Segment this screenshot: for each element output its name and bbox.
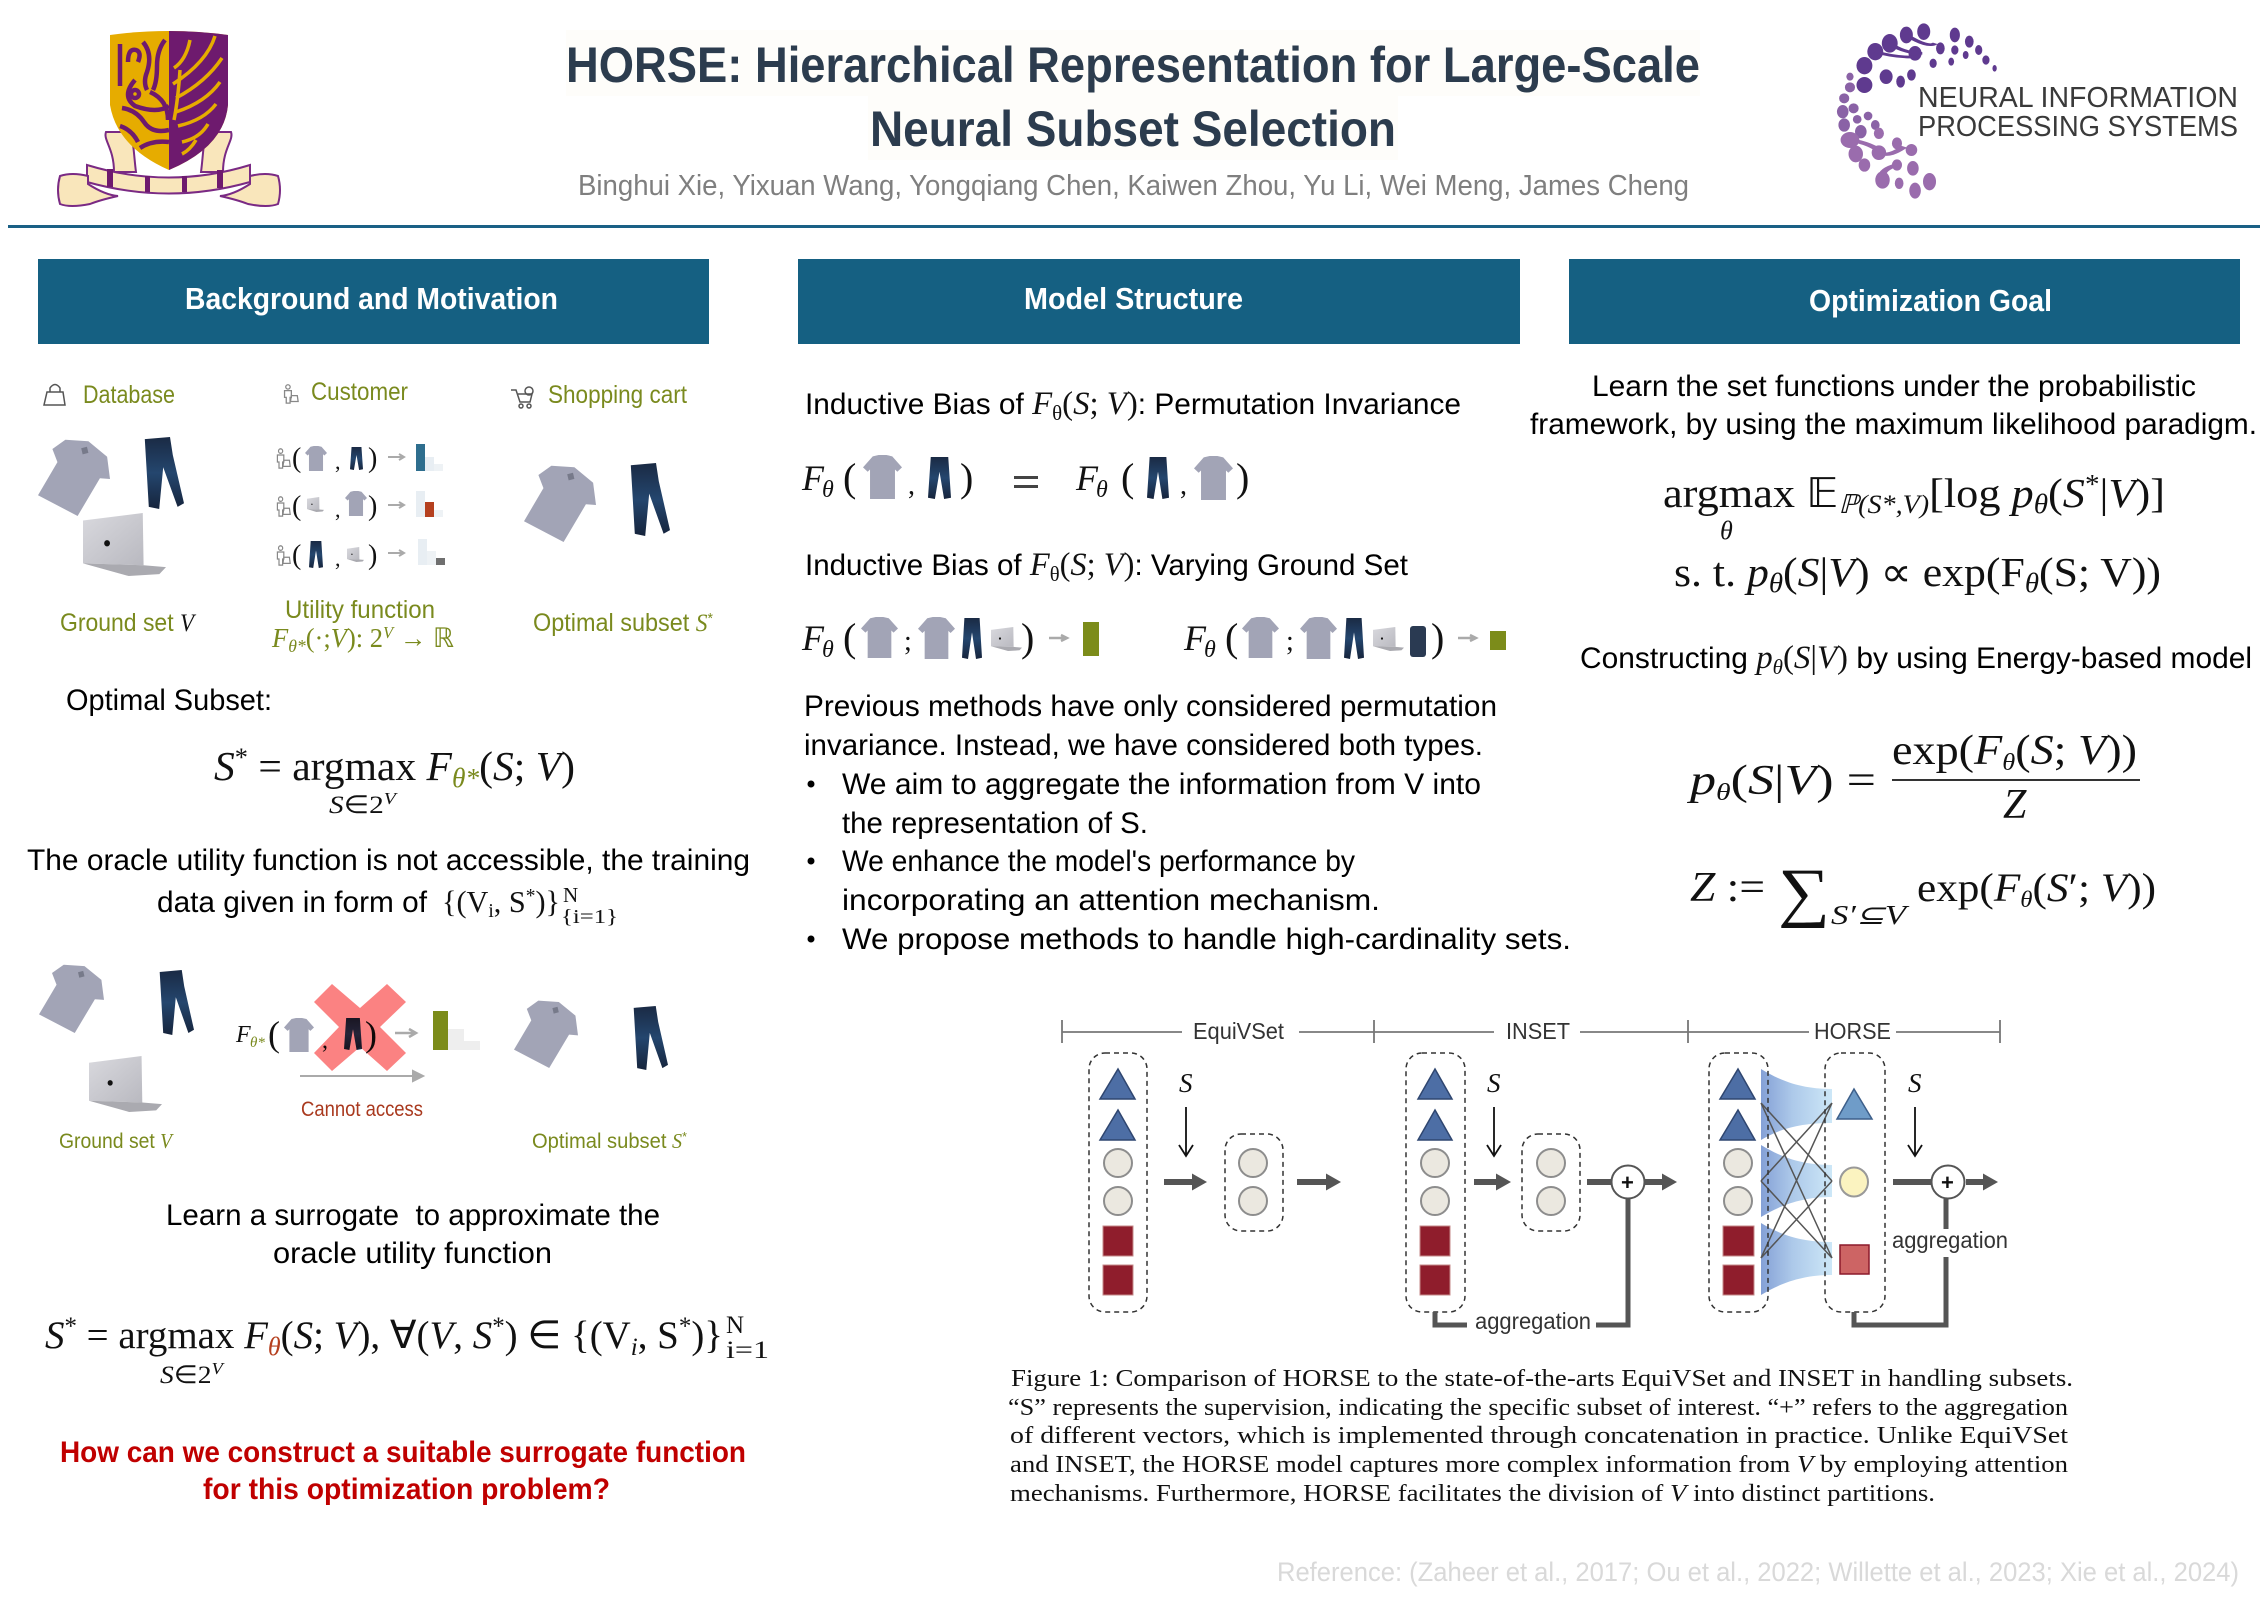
utility rows: ( <box>292 540 301 571</box>
utility rows: , <box>335 497 340 522</box>
equation: varying ground set: ) <box>1431 615 1444 660</box>
formula: optimal subset: S <box>214 743 235 789</box>
label: Utility function: Utility function <box>285 596 435 624</box>
heading: Background and Motivation <box>38 259 709 344</box>
model: INSET <box>1406 1053 1677 1334</box>
callout: question <box>60 1436 746 1506</box>
text: varying ground set: Inductive Bias of F <box>805 547 1050 583</box>
formula: surrogate: * <box>679 1313 691 1340</box>
utility rows: ( <box>292 443 301 474</box>
label: INSET: INSET <box>1506 1018 1570 1044</box>
formula: energy based model: S; V)) <box>2031 728 2134 774</box>
formula: surrogate: ( <box>281 1314 294 1357</box>
text: learn a surrogate <box>166 1199 660 1270</box>
icon: database bag <box>44 384 65 405</box>
label: Utility function: V <box>383 623 396 642</box>
diagram: cannot access: F <box>235 1022 251 1048</box>
model: HORSE: S <box>1908 1068 1922 1098</box>
formula: energy based model: exp(F <box>1892 728 2000 774</box>
formula: optimal subset: * <box>235 743 248 772</box>
formula: surrogate: ) ∈ {(V <box>505 1314 631 1357</box>
equation: permutation invariance: θ <box>1096 477 1108 503</box>
text: previous methods and bullets: We propose methods to handle high-cardinality sets. <box>842 923 1571 956</box>
text: constructing: θ <box>1773 655 1783 679</box>
formula: energy based model: S′; V)) <box>2047 865 2154 910</box>
equation: permutation invariance: , <box>1180 470 1187 501</box>
label: EquiVSet: EquiVSet <box>1193 1018 1285 1044</box>
equation: varying ground set: ( <box>1225 615 1238 660</box>
label: Utility function: → ℝ <box>393 623 454 653</box>
formula: surrogate: * <box>492 1313 505 1340</box>
utility rows: ) <box>368 491 377 522</box>
title block <box>566 30 1700 160</box>
figure caption: and INSET, the HORSE model captures more complex information from V by employing attention <box>1010 1452 2068 1478</box>
model: INSET: S <box>1487 1068 1501 1098</box>
heading: Optimization Goal: Optimization Goal <box>1809 283 2052 318</box>
text: oracle utility <box>27 844 750 928</box>
callout: question: for this optimization problem? <box>203 1473 610 1506</box>
utility rows: , <box>335 449 340 474</box>
diagram: cannot access: ( <box>268 1014 280 1054</box>
formula: surrogate: * <box>64 1313 77 1340</box>
label: Utility function: V): 2 <box>331 623 384 653</box>
utility rows: , <box>335 546 340 571</box>
equation: permutation invariance: F <box>801 458 825 498</box>
equation: varying ground set: ; <box>1286 626 1294 657</box>
formula: surrogate: N <box>726 1312 744 1339</box>
heading: Model Structure: Model Structure <box>1024 281 1243 316</box>
text: oracle utility: The oracle utility function is not accessible, the training <box>27 844 750 877</box>
formula: surrogate: F <box>243 1314 269 1357</box>
text: previous methods and bullets <box>804 690 1571 956</box>
formula: argmax likelihood: ℙ(S*,V) <box>1838 490 1929 519</box>
utility rows: ) <box>368 443 377 474</box>
logo: NeurIPS: PROCESSING SYSTEMS <box>1918 111 2238 143</box>
figure caption: mechanisms. Furthermore, HORSE facilitates the division of V into distinct partitions. <box>1010 1481 1935 1507</box>
formula: energy based model: ( <box>1731 758 1748 804</box>
text: oracle utility: , S <box>494 884 526 919</box>
equation: varying ground set: ; <box>904 626 912 657</box>
formula: energy based model: ( <box>2032 865 2047 910</box>
text: permutation invariance: θ <box>1052 401 1062 425</box>
chart: architecture comparison <box>1062 1018 2008 1334</box>
text: permutation invariance: Inductive Bias of F <box>805 386 1052 422</box>
equation: permutation invariance: θ <box>822 477 834 503</box>
formula: energy based model: p <box>1686 758 1716 804</box>
text: oracle utility: )} <box>535 884 560 919</box>
text: constructing: Constructing p <box>1580 640 1773 676</box>
formula: energy based model: θ <box>2002 750 2015 776</box>
equation: permutation invariance <box>801 455 1249 503</box>
label: Utility function <box>271 596 454 656</box>
text: varying ground set: ( <box>1060 547 1070 583</box>
diagram: cannot access: θ* <box>250 1035 265 1051</box>
formula: surrogate: = argmax <box>77 1314 244 1357</box>
equation: permutation invariance: ( <box>1121 455 1134 500</box>
formula: optimal subset: θ* <box>452 763 480 793</box>
equation: varying ground set: F <box>801 618 825 658</box>
text: learn set functions: Learn the set functions under the probabilistic <box>1592 370 2196 403</box>
figure caption: of different vectors, which is implemented through concatenation in practice. Unlike EquiVSet <box>1010 1423 2068 1449</box>
icon: cart <box>511 387 533 408</box>
formula: argmax likelihood: V)] <box>2108 470 2163 516</box>
model: EquiVSet: S <box>1179 1068 1193 1098</box>
formula: argmax likelihood: θ <box>1769 568 1783 598</box>
diagram: cannot access <box>39 965 668 1112</box>
title block: Neural Subset Selection <box>870 101 1396 157</box>
formula: energy based model <box>1686 728 2156 930</box>
label: Ground set V: Ground set V <box>60 609 196 637</box>
diagram: cannot access: , <box>322 1028 328 1054</box>
figure caption <box>1008 1366 2073 1507</box>
equation: permutation invariance: ) <box>1236 455 1249 500</box>
formula: optimal subset: S∈2 <box>329 792 378 819</box>
formula: surrogate: i <box>631 1334 638 1361</box>
equation: varying ground set: θ <box>1204 637 1216 663</box>
formula: surrogate: S∈2 <box>160 1362 208 1389</box>
text: learn a surrogate: oracle utility function <box>273 1237 552 1270</box>
formula: energy based model: S′⊆V <box>1831 900 1910 930</box>
text: learn set functions <box>1530 370 2257 441</box>
formula: argmax likelihood: θ <box>2034 489 2048 519</box>
panel: Background and Motivation <box>27 259 769 1506</box>
heading: Optimization Goal <box>1569 259 2240 344</box>
label: Utility function: F <box>271 623 289 653</box>
formula: argmax likelihood: s. t. p <box>1674 549 1767 595</box>
formula: argmax likelihood: ( <box>2048 470 2063 516</box>
label: Database: Database <box>83 381 175 409</box>
equation: varying ground set: F <box>1183 618 1207 658</box>
model: EquiVSet <box>1089 1053 1341 1312</box>
label: Ground set V: Ground set V <box>59 1129 174 1153</box>
panel: Model Structure <box>798 259 1571 956</box>
label: Optimal subset S*: Optimal subset S <box>533 609 708 637</box>
label: Customer: Customer <box>311 378 408 406</box>
text: constructing: ( <box>1783 640 1794 676</box>
text: previous methods and bullets: invariance. Instead, we have considered both types. <box>804 729 1483 762</box>
equation: permutation invariance: ( <box>843 455 856 500</box>
label: Optimal subset S*: * <box>708 610 713 627</box>
formula: argmax likelihood: argmax 𝔼 <box>1663 470 1825 516</box>
logo: NeurIPS: NEURAL INFORMATION <box>1918 82 2238 114</box>
reference note: Reference: (Zaheer et al., 2017; Ou et al., 2022; Willette et al., 2023; Xie et al., 2024) <box>1277 1557 2239 1587</box>
formula: argmax likelihood <box>1663 469 2165 598</box>
text: oracle utility: * <box>526 885 535 907</box>
icon: customer <box>285 385 298 403</box>
label: Cannot access: Cannot access <box>301 1098 423 1121</box>
formula: optimal subset: ( <box>479 743 493 789</box>
text: constructing: S|V) by using Energy-based model <box>1794 640 2253 676</box>
heading: Model Structure <box>798 259 1520 344</box>
formula: optimal subset <box>214 743 575 819</box>
text: previous methods and bullets: Previous methods have only considered permutation <box>804 690 1497 723</box>
formula: energy based model: Z := <box>1690 865 1765 911</box>
formula: optimal subset: = argmax <box>248 743 427 789</box>
model: INSET: aggregation <box>1475 1308 1591 1334</box>
utility rows <box>277 443 445 571</box>
formula: surrogate: )} <box>691 1314 723 1357</box>
label: HORSE: HORSE <box>1814 1018 1891 1044</box>
formula: surrogate <box>45 1312 769 1389</box>
formula: argmax likelihood: (S; V)) <box>2039 549 2161 595</box>
utility rows: ( <box>292 491 301 522</box>
heading: Background and Motivation: Background and Motivation <box>185 281 558 316</box>
text: oracle utility: data given in form of <box>157 886 428 919</box>
equation: permutation invariance: F <box>1075 458 1099 498</box>
text: oracle utility: N <box>563 883 578 907</box>
section ruler <box>1062 1020 2000 1043</box>
formula: surrogate: θ <box>268 1332 281 1361</box>
callout: question: How can we construct a suitable surrogate function <box>60 1436 746 1469</box>
label: Utility function: θ* <box>288 636 306 656</box>
text: oracle utility: {(V <box>442 884 490 919</box>
formula: energy based model: ∑ <box>1778 856 1830 929</box>
label: Optimal subset S*: * <box>682 1129 687 1144</box>
model: HORSE: + <box>1941 1170 1954 1195</box>
formula: surrogate: S; V), ∀(V, S <box>294 1314 492 1357</box>
formula: optimal subset: S; V) <box>493 743 575 789</box>
formula: argmax likelihood: ( <box>1783 549 1798 595</box>
formula: optimal subset: V <box>384 789 399 808</box>
formula: argmax likelihood: p <box>2008 470 2034 516</box>
formula: surrogate: i=1 <box>726 1337 769 1364</box>
formula: argmax likelihood: [log <box>1929 470 2012 516</box>
text: oracle utility: {i=1} <box>561 906 618 928</box>
text: previous methods and bullets: We aim to aggregate the information from V into <box>842 768 1481 801</box>
model: HORSE <box>1709 1053 2008 1325</box>
formula: argmax likelihood: θ <box>1720 516 1733 545</box>
formula: surrogate: V <box>212 1359 226 1378</box>
text: learn a surrogate: Learn a surrogate to approximate the <box>166 1199 660 1232</box>
text: previous methods and bullets: incorporating an attention mechanism. <box>842 884 1380 917</box>
text: permutation invariance: ( <box>1062 386 1073 422</box>
equation: varying ground set: ) <box>1021 615 1034 660</box>
label: Shopping cart: Shopping cart <box>548 381 687 409</box>
model: HORSE: aggregation <box>1892 1227 2008 1253</box>
formula: surrogate: S <box>45 1314 64 1357</box>
title block: HORSE: Hierarchical Representation for Large-Scale <box>566 37 1700 93</box>
formula: energy based model: ( <box>2015 728 2031 774</box>
text: varying ground set: S; V): Varying Ground Set <box>1070 547 1412 583</box>
figure caption: Figure 1: Comparison of HORSE to the state-of-the-arts EquiVSet and INSET in handling subsets. <box>1011 1366 2073 1392</box>
formula: energy based model: S|V) = <box>1748 758 1864 804</box>
text: Optimal Subset: Optimal Subset: <box>66 684 272 717</box>
text: previous methods and bullets: the representation of S. <box>842 807 1148 840</box>
label: Utility function: (·; <box>306 623 331 653</box>
figure caption: “S” represents the supervision, indicating the specific subset of interest. “+” refers to the aggregation <box>1008 1395 2068 1421</box>
formula: energy based model: Z <box>2003 782 2027 828</box>
equation: varying ground set: ( <box>843 615 856 660</box>
text: previous methods and bullets: We enhance the model's performance by <box>842 845 1355 878</box>
equation: permutation invariance: ) <box>960 455 973 500</box>
ground set images <box>38 437 184 576</box>
formula: argmax likelihood: S|V) ∝ exp(F <box>1798 549 2014 595</box>
formula: energy based model: θ <box>1716 780 1731 806</box>
formula: argmax likelihood: * <box>2085 469 2100 499</box>
formula: optimal subset: F <box>426 743 453 789</box>
equation: varying ground set <box>801 615 1506 663</box>
text: oracle utility: i <box>488 900 494 922</box>
logo: CUHK crest <box>58 31 280 206</box>
formula: energy based model: exp(F <box>1917 865 2018 910</box>
formula: energy based model: θ <box>2020 887 2032 912</box>
logo: NeurIPS <box>1837 23 2238 199</box>
formula: argmax likelihood: | <box>2100 470 2108 516</box>
formula: argmax likelihood: S <box>2063 470 2085 516</box>
equation: varying ground set: θ <box>822 637 834 663</box>
text: permutation invariance: S; V): Permutation Invariance <box>1073 386 1463 422</box>
panel: Optimization Goal <box>1530 259 2257 930</box>
model: INSET: + <box>1621 1170 1634 1195</box>
label: Optimal subset S*: Optimal subset S <box>532 1129 683 1153</box>
equation: permutation invariance: , <box>908 470 915 501</box>
authors: Binghui Xie, Yixuan Wang, Yongqiang Chen, Kaiwen Zhou, Yu Li, Wei Meng, James Cheng <box>578 170 1689 202</box>
text: varying ground set: θ <box>1050 562 1060 586</box>
utility rows: ) <box>368 540 377 571</box>
diagram: cannot access: ) <box>365 1014 377 1054</box>
text: learn set functions: framework, by using the maximum likelihood paradigm. <box>1530 408 2257 441</box>
formula: surrogate: , S <box>638 1314 679 1357</box>
formula: argmax likelihood: θ <box>2025 568 2039 598</box>
optimal subset images <box>524 463 670 542</box>
